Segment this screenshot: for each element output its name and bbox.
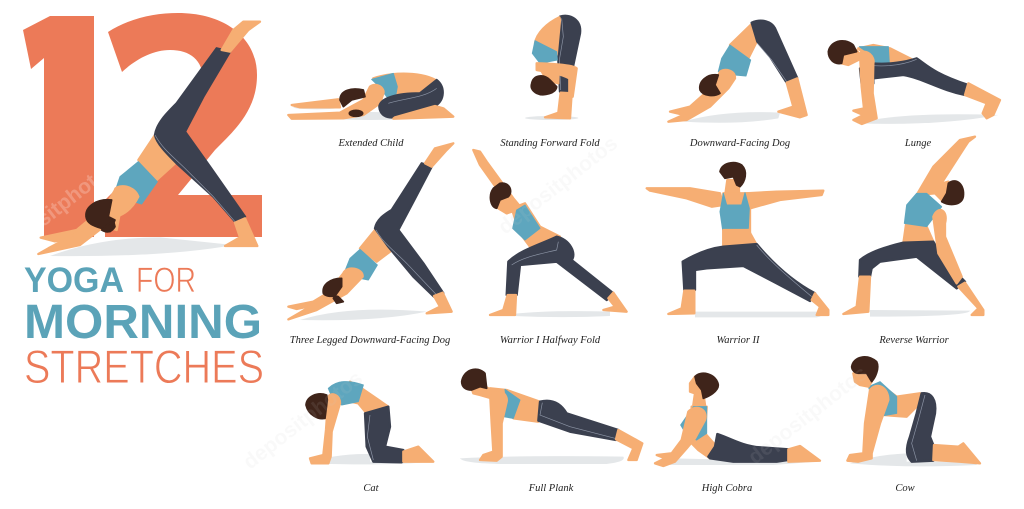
title: STRETCHES [24,340,264,393]
caption: Extended Child [337,138,404,149]
caption: Reverse Warrior [878,335,950,346]
panel: Full Plank [460,369,642,494]
title: MORNING [24,296,262,349]
panel: Three Legged Downward-Facing Dog [288,143,453,346]
figure: cat [306,382,433,464]
panel: Lunge [828,41,1000,149]
caption: Full Plank [528,483,574,494]
panel: Standing Forward Fold [500,16,600,149]
panel: Reverse Warrior [843,137,983,346]
panel: Downward-Facing Dog [668,21,807,149]
caption: Cat [363,483,380,494]
figure: standing forward fold [525,16,580,120]
caption: High Cobra [701,483,752,494]
figure: reverse warrior [843,137,983,317]
figure: warrior II [647,163,828,317]
panel: Cat [306,382,433,494]
watermark [0,132,872,474]
figure: cow [847,357,980,466]
figure: high cobra [655,373,820,466]
figure: three legged downward-facing dog [288,143,453,320]
title: YOGA [24,261,124,300]
number 12 [23,13,262,237]
caption: Three Legged Downward-Facing Dog [290,335,450,346]
hero figure: three legged downward-facing dog [38,22,260,256]
caption: Warrior II [716,335,760,346]
panel: Warrior I Halfway Fold [473,150,627,346]
panel: Cow [847,357,980,494]
watermark: depositphotos [744,362,872,469]
caption: Cow [895,483,915,494]
watermark: depositphotos [239,367,367,474]
panel: High Cobra [655,373,820,494]
caption: Downward-Facing Dog [689,138,790,149]
panel: Warrior II [647,163,828,346]
figure: extended child [288,73,453,120]
title: FOR [136,261,196,300]
figure: full plank [460,369,642,464]
figure: downward-facing dog [668,21,807,123]
caption: Lunge [904,138,931,149]
figure: warrior I halfway fold [473,150,627,317]
panel: Extended Child [288,73,453,149]
title [24,261,264,393]
caption: Warrior I Halfway Fold [500,335,601,346]
watermark: depositphotos [494,132,622,239]
figure: lunge [828,41,1000,124]
caption: Standing Forward Fold [500,138,600,149]
